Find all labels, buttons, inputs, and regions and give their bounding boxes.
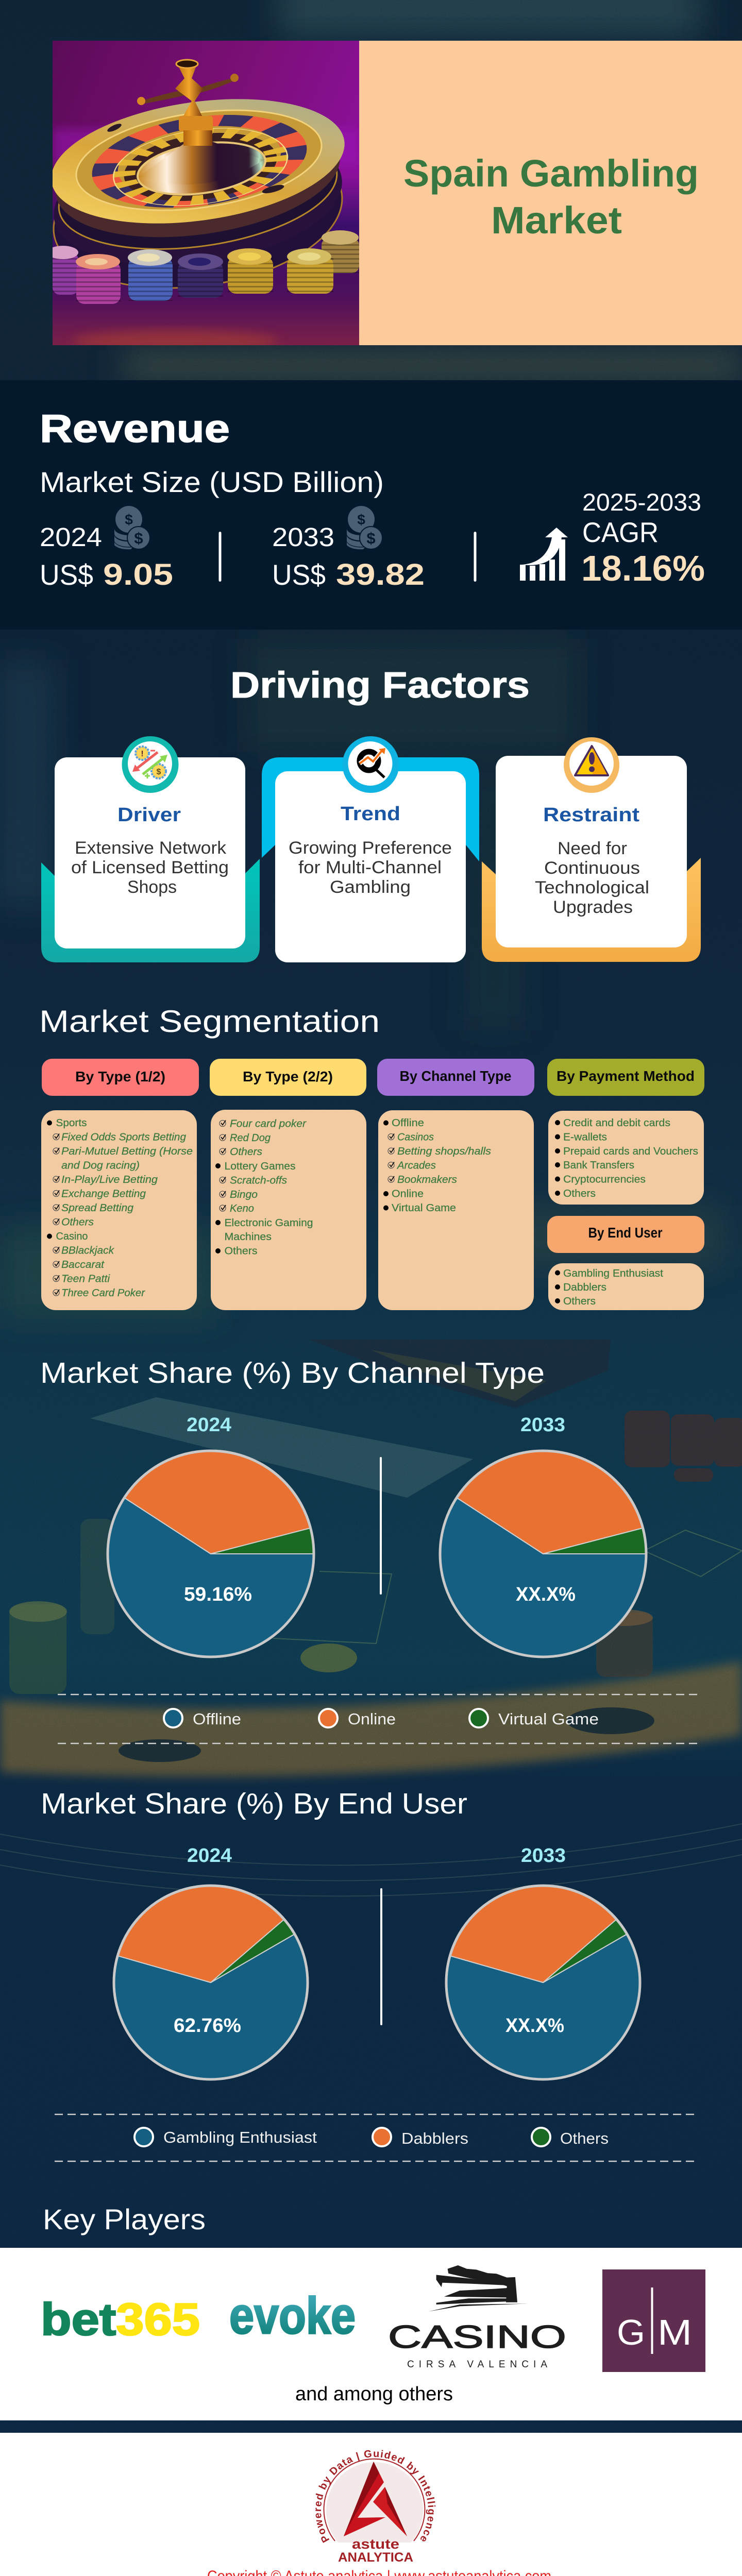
- icon: driver: [122, 736, 178, 793]
- legend: channel type: [164, 1709, 599, 1728]
- list: Casinos: [397, 1131, 434, 1143]
- logo: GM: G: [617, 2312, 645, 2352]
- list: Sports: [56, 1117, 87, 1129]
- list: [211, 1110, 366, 1310]
- panel: key players logos: [0, 2248, 742, 2420]
- list: Online: [392, 1188, 424, 1199]
- pie chart: end user 2033: [446, 1845, 640, 2079]
- value: 59.16%: [184, 1584, 252, 1605]
- legend: end user: Dabblers: [401, 2129, 468, 2147]
- logo: bet365: bet365: [41, 2294, 200, 2345]
- list: [41, 1110, 197, 1310]
- list: Pari-Mutuel Betting (Horse: [61, 1146, 193, 1157]
- stat: 2024: [40, 506, 173, 591]
- list: Bank Transfers: [563, 1160, 634, 1171]
- legend: channel type: Offline: [193, 1710, 241, 1728]
- panel: footer: [0, 2433, 742, 2576]
- segment: by end user: [547, 1216, 704, 1310]
- market size label: Market Size (USD Billion): [40, 466, 384, 498]
- restraint description: Upgrades: [553, 897, 633, 917]
- revenue panel: [0, 380, 742, 630]
- list: and Dog racing): [61, 1160, 140, 1172]
- list: Scratch-offs: [230, 1175, 287, 1186]
- logo: GM: M: [657, 2312, 692, 2352]
- list: Others: [225, 1246, 258, 1257]
- header: By Type (1/2): [75, 1069, 165, 1084]
- stat: 2024: 2024: [40, 522, 102, 552]
- trend description: Gambling: [330, 877, 411, 897]
- list: Others: [61, 1217, 94, 1228]
- title: [403, 152, 699, 242]
- list: Machines: [225, 1231, 272, 1243]
- driver description: Shops: [127, 877, 177, 897]
- list: Spread Betting: [61, 1202, 133, 1214]
- year label: 2033: [520, 1414, 565, 1436]
- header: By Channel Type: [400, 1068, 511, 1084]
- list: Casino: [56, 1231, 88, 1242]
- title panel: [359, 41, 742, 345]
- legend: channel type: Online: [348, 1710, 396, 1728]
- list: In-Play/Live Betting: [61, 1174, 158, 1185]
- heading: driving factors: Driving Factors: [230, 665, 530, 706]
- trend description: Growing Preference: [289, 838, 452, 858]
- list: Red Dog: [230, 1132, 271, 1144]
- legend: end user: [134, 2128, 609, 2147]
- hero panel: [43, 41, 742, 352]
- header: [42, 1059, 199, 1096]
- driver description: of Licensed Betting: [71, 858, 229, 877]
- list: BBlackjack: [61, 1245, 114, 1256]
- stat: CAGR: 18.16%: [581, 548, 705, 588]
- list: Credit and debit cards: [563, 1117, 670, 1129]
- list: Prepaid cards and Vouchers: [563, 1146, 698, 1157]
- header: [377, 1059, 534, 1096]
- text: and among others: and among others: [295, 2383, 453, 2405]
- card: restraint: [482, 737, 701, 962]
- list: Betting shops/halls: [397, 1146, 491, 1157]
- stat: 2024: 9.05: [103, 558, 173, 591]
- header: By Type (2/2): [243, 1069, 333, 1084]
- header: [210, 1059, 366, 1096]
- heading: market segmentation: Market Segmentation: [39, 1004, 380, 1039]
- restraint description: Technological: [535, 878, 649, 897]
- stat: CAGR: [581, 488, 705, 588]
- list: Bingo: [230, 1189, 258, 1200]
- legend: channel type: Virtual Game: [498, 1710, 599, 1728]
- logo: casino cirsa valencia: [388, 2265, 566, 2370]
- list: Bookmakers: [397, 1174, 457, 1185]
- list: Four card poker: [230, 1118, 307, 1129]
- driver description: Extensive Network: [75, 838, 227, 858]
- logo: evoke: evoke: [229, 2287, 356, 2345]
- trend description: [289, 838, 452, 897]
- logo: casino cirsa valencia: CIRSA VALENCIA: [407, 2359, 547, 2370]
- logo: casino cirsa valencia: CASINO: [388, 2319, 566, 2355]
- stat: 2024: US$: [40, 558, 93, 591]
- list: [548, 1263, 704, 1310]
- segment: by type 1: [41, 1059, 199, 1310]
- card: trend: [262, 736, 479, 962]
- logo: GM: [602, 2269, 705, 2372]
- driver description: [71, 838, 229, 897]
- header: [547, 1216, 704, 1253]
- stat: CAGR: 2025-2033: [582, 488, 701, 516]
- list: Others: [563, 1188, 596, 1199]
- restraint description: Continuous: [544, 858, 640, 878]
- title: Spain Gambling: [403, 152, 699, 195]
- list: Virtual Game: [392, 1202, 456, 1214]
- stat: 2033: [272, 506, 425, 591]
- list: Cryptocurrencies: [563, 1174, 646, 1185]
- icon: trend: [342, 736, 399, 793]
- driver title: Driver: [117, 804, 181, 826]
- chip stacks: [47, 230, 359, 304]
- hero image: roulette wheel: [43, 41, 359, 352]
- legend: end user: Others: [560, 2129, 609, 2147]
- list: Others: [230, 1146, 262, 1158]
- list: Others: [563, 1296, 596, 1307]
- list: Keno: [230, 1203, 254, 1214]
- list: Fixed Odds Sports Betting: [61, 1131, 186, 1143]
- list: Arcades: [397, 1160, 436, 1172]
- legend: end user: Gambling Enthusiast: [163, 2128, 317, 2146]
- revenue heading: Revenue: [40, 407, 230, 451]
- list: Gambling Enthusiast: [563, 1268, 663, 1279]
- stat: CAGR: CAGR: [582, 516, 659, 548]
- heading: market share by channel type: Market Share (%) By Channel Type: [40, 1357, 545, 1389]
- icon: restraint: [564, 737, 619, 793]
- list: Lottery Games: [225, 1161, 296, 1172]
- card: driver: [41, 736, 260, 962]
- trend title: Trend: [341, 803, 400, 825]
- year label: 2033: [521, 1845, 566, 1867]
- icon: driver: !: [141, 750, 144, 758]
- heading: market share by end user: Market Share (%) By End User: [41, 1787, 467, 1820]
- logo: astute analytica: Powered by Data | Guided by Intelligence: [315, 2450, 436, 2543]
- list: Dabblers: [563, 1282, 606, 1293]
- title: Market: [491, 199, 622, 242]
- list: Exchange Betting: [61, 1188, 146, 1199]
- restraint title: Restraint: [543, 804, 639, 826]
- list: [378, 1110, 534, 1310]
- trend description: for Multi-Channel: [298, 858, 442, 877]
- stat: 2033: US$: [272, 558, 326, 591]
- heading: key players: Key Players: [43, 2203, 206, 2235]
- segment: by channel type: [377, 1059, 534, 1310]
- year label: 2024: [187, 1414, 231, 1436]
- pie chart: end user 2024: [114, 1845, 308, 2079]
- header: [547, 1059, 704, 1096]
- icon: growth arrow: [520, 528, 568, 581]
- list: [548, 1111, 704, 1205]
- stat: 2033: 39.82: [336, 558, 425, 591]
- header: By End User: [588, 1225, 663, 1241]
- value: XX.X%: [505, 2015, 564, 2037]
- list: Baccarat: [61, 1259, 105, 1270]
- stat: 2033: 2033: [272, 522, 334, 552]
- list: Teen Patti: [61, 1274, 110, 1285]
- year label: 2024: [187, 1845, 232, 1867]
- logo: astute analytica: ANALYTICA: [338, 2550, 413, 2565]
- list: Offline: [392, 1117, 424, 1129]
- list: E-wallets: [563, 1131, 607, 1143]
- icon: driver: $: [157, 768, 161, 776]
- pie chart: channel type 2033: [440, 1414, 646, 1657]
- pie chart: channel type 2024: [108, 1414, 314, 1657]
- restraint description: [535, 839, 649, 917]
- list: Electronic Gaming: [225, 1217, 313, 1229]
- list: Three Card Poker: [61, 1287, 145, 1299]
- header: By Payment Method: [556, 1068, 695, 1084]
- segment: by payment method: [547, 1059, 704, 1205]
- value: XX.X%: [516, 1584, 576, 1605]
- logo: astute analytica: astute: [352, 2536, 399, 2552]
- value: 62.76%: [174, 2015, 241, 2037]
- segment: by type 2: [210, 1059, 366, 1310]
- restraint description: Need for: [558, 839, 627, 858]
